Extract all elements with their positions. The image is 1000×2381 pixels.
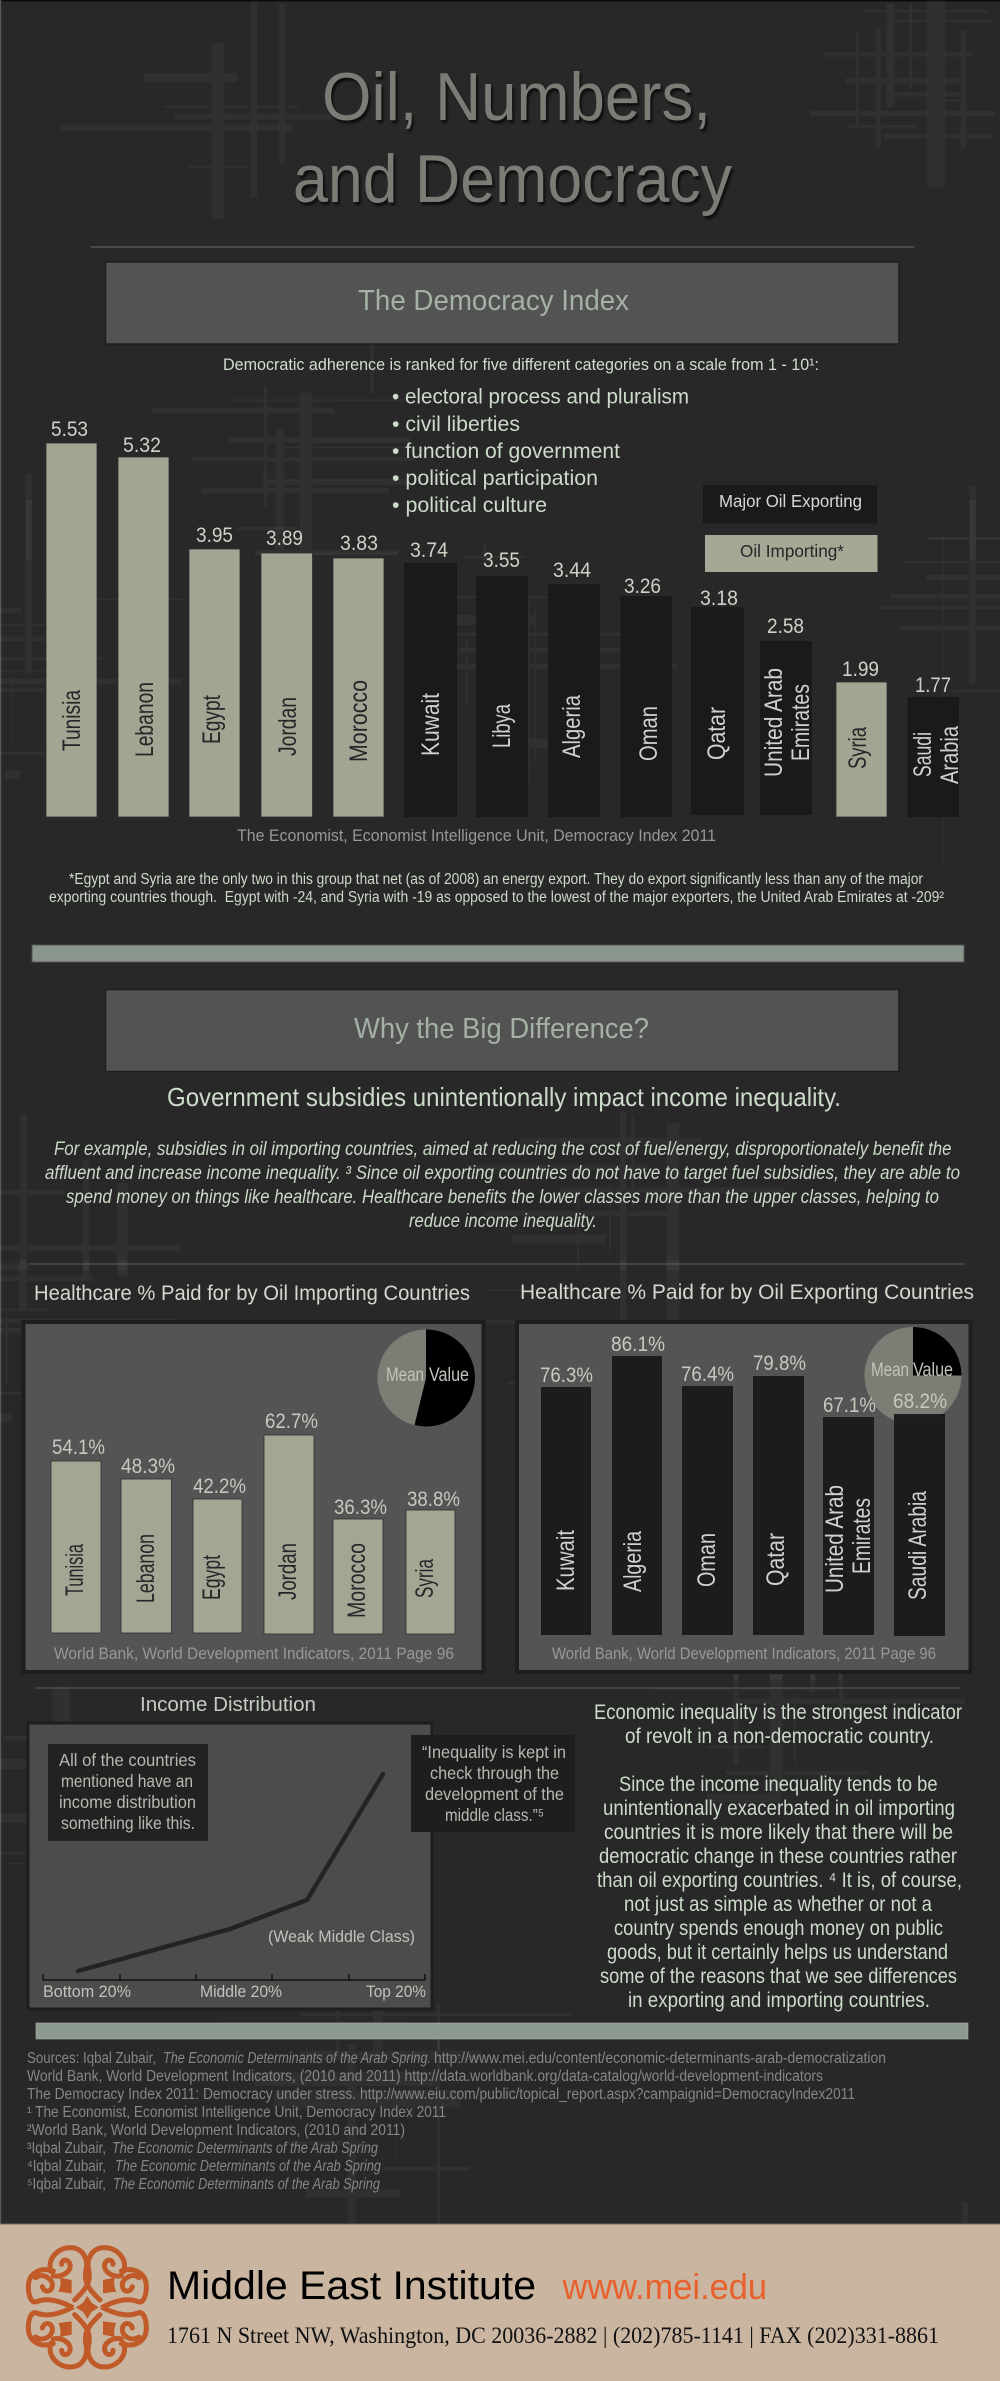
text block: economic inequality: countries it is more likely that there will be — [604, 1821, 953, 1844]
sources: The Economic Determinants of the Arab Spring. — [163, 2050, 431, 2067]
bar: Saudi Arabia: Arabia — [936, 726, 964, 784]
icon: Middle East Institute logo — [28, 2248, 146, 2367]
chart heading: oil importing: Healthcare % Paid for by Oil Importing Countries — [34, 1282, 470, 1305]
intro text: Democratic adherence is ranked for five different categories on a scale from 1 - 10¹: — [223, 356, 819, 374]
bar: Qatar — [753, 1352, 806, 1635]
axis labels — [43, 1982, 426, 2001]
panel: why the big difference heading: Why the Big Difference? — [354, 1013, 649, 1045]
pie: mean vs value: Mean — [871, 1360, 909, 1381]
footnote — [49, 871, 944, 906]
bar: Saudi Arabia: Saudi — [909, 732, 937, 777]
bar: Oman — [681, 1363, 734, 1635]
bar: Jordan: Jordan — [274, 697, 302, 756]
chart source: World Bank, World Development Indicators, 2011 Page 96 — [54, 1644, 454, 1663]
bar: Qatar — [691, 587, 744, 815]
callout: income distribution note: income distribution — [59, 1792, 196, 1812]
bar: United Arab Emirates: Emirates — [848, 1498, 876, 1574]
axis — [43, 1974, 425, 1980]
bar: United Arab Emirates — [760, 615, 815, 815]
line: income curve — [78, 1774, 383, 1971]
pie: mean vs value — [864, 1327, 962, 1424]
website: www.mei.edu — [562, 2266, 767, 2307]
bar: United Arab Emirates — [821, 1394, 876, 1635]
text block: economic inequality: goods, but it certainly helps us understand — [607, 1941, 948, 1964]
title — [293, 59, 732, 217]
sources: ²World Bank, World Development Indicators, (2010 and 2011) — [27, 2122, 405, 2139]
text block: economic inequality: some of the reasons that we see differences — [600, 1965, 957, 1988]
bar: United Arab Emirates: United Arab — [760, 668, 788, 777]
bar: Kuwait: 3.74 — [410, 539, 448, 562]
bar: Morocco: 36.3% — [334, 1496, 387, 1519]
bar: United Arab Emirates: Emirates — [787, 684, 815, 761]
bar: Lebanon — [118, 434, 169, 817]
bar: Jordan — [264, 1410, 318, 1634]
bar: Oman — [620, 575, 672, 817]
bar: Libya: Libya — [488, 704, 516, 748]
bullet list: categories: • electoral process and pluralism — [392, 386, 689, 408]
callout: income distribution note: mentioned have an — [61, 1771, 193, 1791]
bar: Tunisia: 54.1% — [52, 1436, 105, 1459]
bar: Algeria: Algeria — [619, 1531, 647, 1592]
bullet list: categories — [392, 386, 689, 517]
bar: Qatar: 79.8% — [753, 1352, 806, 1375]
paragraph: reduce income inequality. — [409, 1211, 597, 1232]
bar: Qatar: Qatar — [762, 1533, 790, 1586]
text block: economic inequality — [594, 1701, 962, 2012]
bar: Libya — [476, 549, 528, 817]
bar: Morocco — [333, 532, 384, 817]
bar: Kuwait — [404, 539, 457, 817]
callout: quote: check through the — [430, 1763, 559, 1783]
chart source: World Bank, World Development Indicators, 2011 Page 96 — [552, 1644, 936, 1663]
bar: Algeria: 86.1% — [611, 1333, 665, 1356]
title: Oil, Numbers, — [322, 59, 711, 135]
bar: Morocco: Morocco — [345, 680, 373, 762]
bar: Lebanon: Lebanon — [132, 1534, 160, 1603]
text block: economic inequality: than oil exporting countries. ⁴ It is, of course, — [597, 1869, 962, 1892]
axis labels: Bottom 20% — [43, 1982, 131, 2001]
callout: income distribution note: All of the countries — [59, 1750, 196, 1770]
bullet list: categories: • function of government — [392, 440, 620, 463]
bar: Qatar: 3.18 — [700, 587, 738, 610]
heading: income distribution: Income Distribution — [140, 1694, 316, 1716]
pie: mean vs value: Mean — [386, 1365, 424, 1386]
bullet list: categories: • political culture — [392, 494, 547, 517]
text block: economic inequality: unintentionally exacerbated in oil importing — [603, 1797, 955, 1820]
bar: Oman: 76.4% — [681, 1363, 734, 1386]
legend: Oil Importing* — [740, 541, 844, 561]
bar: Tunisia: Tunisia — [61, 1544, 89, 1596]
bar: Egypt: 42.2% — [193, 1475, 246, 1498]
text block: economic inequality: not just as simple as whether or not a — [624, 1893, 932, 1916]
bar: Syria: 1.99 — [842, 658, 879, 681]
sources — [27, 2050, 886, 2193]
headline: Government subsidies unintentionally impact income inequality. — [167, 1082, 841, 1112]
sources: ³Iqbal Zubair, — [27, 2140, 106, 2157]
bar: Syria: Syria — [844, 727, 872, 769]
bar: Saudi Arabia: Saudi Arabia — [904, 1491, 932, 1600]
sources: ¹ The Economist, Economist Intelligence Unit, Democracy Index 2011 — [27, 2104, 446, 2121]
bar: Algeria — [611, 1333, 665, 1635]
bar: Oman: 3.26 — [624, 575, 661, 598]
pie: mean vs value: Value — [429, 1365, 469, 1386]
bar: Tunisia: 5.53 — [51, 418, 88, 441]
sources: The Economic Determinants of the Arab Spring — [115, 2158, 381, 2175]
bar: United Arab Emirates: United Arab — [821, 1485, 849, 1593]
bar: Egypt — [189, 524, 240, 817]
bar: Egypt: Egypt — [198, 1555, 226, 1600]
bar: Oman: Oman — [693, 1533, 721, 1587]
text block: economic inequality: democratic change in these countries rather — [599, 1845, 957, 1868]
axis labels: Top 20% — [366, 1982, 426, 2001]
bar: Lebanon — [121, 1455, 175, 1633]
callout: income distribution note: something like this. — [61, 1813, 195, 1833]
bullet list: categories: • civil liberties — [392, 413, 520, 436]
sources: World Bank, World Development Indicators, (2010 and 2011) http://data.worldbank.org/data-catalog/world-development-indicators — [27, 2068, 823, 2085]
text block: economic inequality: country spends enough money on public — [614, 1917, 943, 1940]
bar: Libya: 3.55 — [483, 549, 520, 572]
sources: Sources: Iqbal Zubair, — [27, 2050, 156, 2067]
bar: Algeria — [548, 559, 600, 817]
bar: Morocco: 3.83 — [340, 532, 378, 555]
bar: Tunisia — [46, 418, 97, 817]
bar: Tunisia — [51, 1436, 105, 1633]
legend: Major Oil Exporting — [719, 491, 862, 511]
bar: Saudi Arabia — [908, 674, 964, 817]
callout: income distribution note — [48, 1744, 208, 1841]
sources: ⁴Iqbal Zubair, — [27, 2158, 106, 2175]
callout: quote — [411, 1735, 575, 1832]
bar: Lebanon: 5.32 — [123, 434, 161, 457]
pie: mean vs value — [378, 1329, 475, 1426]
bar: Kuwait: Kuwait — [552, 1530, 580, 1591]
bar: Lebanon: 48.3% — [121, 1455, 175, 1478]
callout: quote: middle class.”⁵ — [445, 1805, 544, 1825]
sources: http://www.mei.edu/content/economic-determinants-arab-democratization — [434, 2050, 886, 2067]
bar: Egypt: Egypt — [198, 695, 226, 744]
callout: quote: development of the — [425, 1784, 564, 1804]
bar: Tunisia: Tunisia — [58, 690, 86, 751]
bar: Syria — [836, 658, 887, 817]
bar: United Arab Emirates: 67.1% — [823, 1394, 876, 1417]
paragraph — [45, 1139, 960, 1232]
pie: mean vs value: Value — [913, 1360, 953, 1381]
address: 1761 N Street NW, Washington, DC 20036-2882 | (202)785-1141 | FAX (202)331-8861 — [167, 2323, 939, 2348]
bar: Syria — [406, 1488, 460, 1634]
panel: the democracy index heading: The Democracy Index — [358, 285, 629, 317]
sources: The Economic Determinants of the Arab Spring — [113, 2176, 380, 2193]
chart heading: oil exporting: Healthcare % Paid for by Oil Exporting Countries — [520, 1281, 974, 1304]
text block: economic inequality: of revolt in a non-democratic country. — [625, 1725, 934, 1748]
footnote: *Egypt and Syria are the only two in this group that net (as of 2008) an energy export. They do export significantly less than any of the major — [69, 871, 923, 888]
bar: Saudi Arabia — [893, 1390, 947, 1636]
panel: why the big difference heading — [106, 990, 899, 1072]
chart source: The Economist, Economist Intelligence Unit, Democracy Index 2011 — [237, 826, 716, 845]
bar: Algeria: Algeria — [558, 695, 586, 758]
bar: United Arab Emirates: 2.58 — [767, 615, 804, 638]
bar: Jordan: 3.89 — [266, 527, 303, 550]
bar: Saudi Arabia: 1.77 — [915, 674, 951, 697]
bar: Morocco — [333, 1496, 387, 1634]
bar: Oman: Oman — [635, 706, 663, 761]
footer band — [0, 2224, 1000, 2381]
panel: income distribution chart — [28, 1723, 575, 2009]
legend — [703, 485, 878, 572]
callout: quote: “Inequality is kept in — [422, 1742, 566, 1762]
panel: oil importing healthcare chart — [24, 1322, 484, 1672]
bar: Kuwait: 76.3% — [540, 1364, 593, 1387]
sources: ⁵Iqbal Zubair, — [27, 2176, 106, 2193]
bar: Syria: Syria — [411, 1559, 439, 1598]
bullet list: categories: • political participation — [392, 467, 598, 490]
sources: The Democracy Index 2011: Democracy under stress. http://www.eiu.com/public/topical_report.aspx?campaignid=DemocracyIndex2011 — [27, 2086, 855, 2103]
bar: Qatar: Qatar — [703, 707, 731, 760]
annotation: weak middle class: (Weak Middle Class) — [268, 1927, 415, 1946]
sources: The Economic Determinants of the Arab Spring — [112, 2140, 378, 2157]
bar: Egypt: 3.95 — [196, 524, 233, 547]
title: and Democracy — [293, 141, 732, 217]
bar: Morocco: Morocco — [343, 1543, 371, 1618]
bar: Syria: 38.8% — [407, 1488, 460, 1511]
bar: Jordan: Jordan — [274, 1543, 302, 1600]
bar: Saudi Arabia: 68.2% — [893, 1390, 947, 1413]
bar: Egypt — [193, 1475, 246, 1633]
axis labels: Middle 20% — [200, 1982, 282, 2001]
bar: Kuwait: Kuwait — [417, 693, 445, 756]
panel: oil exporting healthcare chart — [517, 1322, 970, 1672]
organisation name: Middle East Institute — [167, 2264, 536, 2308]
bar: Jordan — [261, 527, 312, 817]
text block: economic inequality: Since the income inequality tends to be — [619, 1773, 938, 1796]
bar: Lebanon: Lebanon — [131, 682, 159, 757]
bar chart: democracy index — [46, 418, 964, 817]
panel: the democracy index heading — [106, 262, 899, 344]
bar: Kuwait — [540, 1364, 593, 1635]
bar: Algeria: 3.44 — [553, 559, 591, 582]
text block: economic inequality: in exporting and importing countries. — [628, 1989, 930, 2012]
bar: Jordan: 62.7% — [265, 1410, 318, 1433]
